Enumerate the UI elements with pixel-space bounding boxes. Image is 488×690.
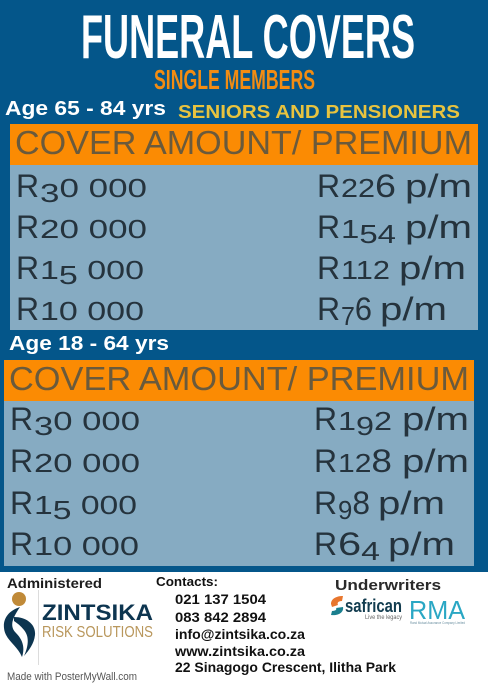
contact details: 22 Sinagogo Crescent, Ilitha Park xyxy=(175,659,396,675)
row: R20 000 seniors: 1 xyxy=(341,214,359,244)
row: R30 000 adults: 9 xyxy=(356,411,374,441)
row: R30 000 seniors: 226 xyxy=(341,168,396,204)
row: R10 000 seniors xyxy=(16,291,447,331)
row: R20 000 seniors: R xyxy=(16,209,39,245)
row: R15 000 adults: 8 xyxy=(352,485,370,521)
row: R20 000 adults: R xyxy=(314,443,337,479)
row: R20 000 seniors: p/m xyxy=(405,209,472,245)
row: R15 000 adults: 5 xyxy=(53,495,71,525)
contact details: www.zintsika.co.za xyxy=(174,643,305,659)
row: R30 000 seniors xyxy=(16,168,472,208)
age heading: adults: Age 18 - 64 yrs xyxy=(9,333,169,355)
contacts heading: Contacts: xyxy=(156,574,218,589)
row: R30 000 adults: 2 xyxy=(374,406,392,436)
row: R30 000 adults: 1 xyxy=(338,406,356,436)
row: R10 000 adults: R xyxy=(314,526,337,562)
header text: seniors: COVER AMOUNT/ PREMIUM xyxy=(15,124,472,161)
logo: safrican: Live the legacy xyxy=(365,615,402,621)
row: R30 000 adults: 3 xyxy=(34,411,53,441)
row: R20 000 adults: 20 000 xyxy=(34,448,140,478)
row: R30 000 adults: 0 000 xyxy=(53,406,140,436)
contact details: 021 137 1504 xyxy=(175,591,266,607)
row: R15 000 seniors: 1 xyxy=(40,255,59,285)
row: R15 000 adults: R xyxy=(10,485,33,521)
row: R20 000 seniors: 20 000 xyxy=(40,214,147,244)
icon: zintsika logo mark xyxy=(4,592,35,657)
watermark: Made with PosterMyWall.com xyxy=(7,671,137,683)
row: R10 000 seniors: p/m xyxy=(380,291,447,327)
row: R10 000 seniors: 7 xyxy=(341,301,355,331)
administered label: Administered xyxy=(7,575,102,591)
row: R10 000 adults: 4 xyxy=(361,536,380,566)
row: R30 000 seniors: 0 000 xyxy=(59,173,147,203)
row: R10 000 adults: p/m xyxy=(388,526,455,562)
header text: adults: COVER AMOUNT/ PREMIUM xyxy=(9,360,469,397)
row: R15 000 adults: 9 xyxy=(338,495,352,525)
contact details: info@zintsika.co.za xyxy=(175,626,305,642)
zintsika name: ZINTSIKA xyxy=(42,600,153,625)
row: R30 000 adults xyxy=(10,401,469,441)
divider xyxy=(38,590,39,665)
logo: RMA: RMA xyxy=(409,595,466,625)
row: R20 000 adults xyxy=(10,443,469,479)
subtitle: SINGLE MEMBERS xyxy=(154,64,315,95)
row: R15 000 adults xyxy=(10,485,445,525)
underwriters heading: Underwriters xyxy=(335,577,441,594)
row: R10 000 seniors: R xyxy=(16,291,39,327)
row: R15 000 adults: 000 xyxy=(71,490,137,520)
row: R30 000 adults: R xyxy=(314,401,337,437)
contact details xyxy=(174,591,396,675)
row: R20 000 seniors: R xyxy=(317,209,340,245)
zintsika tagline: RISK SOLUTIONS xyxy=(42,624,153,641)
row: R10 000 seniors: 6 xyxy=(355,291,372,327)
contact details: 083 842 2894 xyxy=(175,609,266,625)
row: R15 000 seniors: 5 xyxy=(59,260,78,290)
row: R15 000 seniors: 000 xyxy=(78,255,144,285)
row: R15 000 seniors: 112 xyxy=(341,255,390,285)
header bar: seniors xyxy=(10,124,478,165)
row: R10 000 seniors: R xyxy=(317,291,340,327)
row: R30 000 adults: R xyxy=(10,401,33,437)
row: R10 000 adults: 10 000 xyxy=(34,531,139,561)
panel: adults table xyxy=(4,360,474,566)
logo: safrican: safrican xyxy=(345,596,402,616)
age heading: seniors: Age 65 - 84 yrs xyxy=(5,98,166,120)
row: R10 000 adults: 6 xyxy=(338,526,356,562)
row: R30 000 seniors: R xyxy=(317,168,340,204)
panel: footer xyxy=(0,572,488,690)
row: R20 000 seniors: 54 xyxy=(359,219,396,249)
row: R20 000 adults: 128 xyxy=(338,443,392,479)
row: R15 000 seniors xyxy=(16,250,466,290)
row: R20 000 adults: p/m xyxy=(402,443,469,479)
row: R10 000 seniors: 10 000 xyxy=(40,296,144,326)
panel: seniors table xyxy=(10,124,478,331)
seniors label: SENIORS AND PENSIONERS xyxy=(178,102,460,122)
row: R10 000 adults: R xyxy=(10,526,33,562)
row: R15 000 adults: R xyxy=(314,485,337,521)
header bar: adults xyxy=(4,360,474,401)
row: R15 000 seniors: p/m xyxy=(399,250,466,286)
row: R20 000 adults: R xyxy=(10,443,33,479)
row: R20 000 seniors xyxy=(16,209,472,249)
logo: RMA: Rand Mutual Assurance Company Limited xyxy=(410,621,465,625)
row: R30 000 seniors: R xyxy=(16,168,39,204)
row: R15 000 seniors: R xyxy=(16,250,39,286)
row: R30 000 seniors: p/m xyxy=(405,168,472,204)
row: R30 000 seniors: 3 xyxy=(40,178,59,208)
row: R15 000 adults: 1 xyxy=(34,490,53,520)
logo: safrican xyxy=(331,596,402,621)
row: R15 000 adults: p/m xyxy=(378,485,445,521)
row: R10 000 adults xyxy=(10,526,455,566)
row: R30 000 adults: p/m xyxy=(402,401,469,437)
row: R15 000 seniors: R xyxy=(317,250,340,286)
